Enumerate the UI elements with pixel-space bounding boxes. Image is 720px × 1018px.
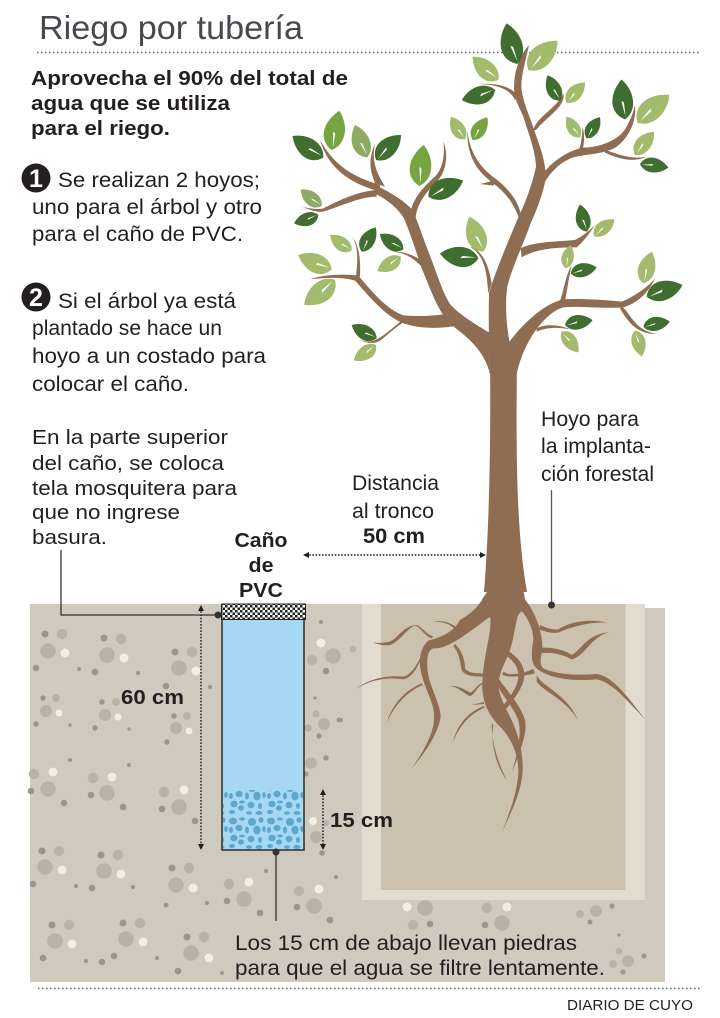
leaves: light <box>294 33 676 367</box>
step 1 <box>22 164 262 246</box>
label: distance to trunk: Distancia <box>352 472 439 495</box>
intro text: agua que se utiliza <box>31 92 231 115</box>
PVC pipe <box>222 604 306 850</box>
roots <box>355 590 645 832</box>
badge 1: 1 <box>29 165 43 193</box>
soil pebbles: dark <box>28 620 646 975</box>
label: hole: la implanta- <box>541 435 651 458</box>
badge 2 <box>22 282 50 312</box>
leaves: muted green <box>296 122 375 212</box>
leaves: dark <box>286 21 685 345</box>
label: 60 cm: 60 cm <box>121 686 184 709</box>
filter stones <box>223 790 303 849</box>
label: Caño de PVC: PVC <box>239 579 283 602</box>
step 1: uno para el árbol y otro <box>32 196 262 219</box>
title: Riego por tubería <box>39 10 303 47</box>
badge 1 <box>22 164 50 193</box>
intro text <box>31 67 348 140</box>
label: hole: Hoyo para <box>541 408 639 431</box>
credit: DIARIO DE CUYO <box>567 997 693 1014</box>
arrow: 60 cm depth <box>200 608 202 847</box>
panel: planting hole <box>362 604 645 900</box>
step 2: plantado se hace un <box>32 317 222 340</box>
label: distance to trunk: 50 cm <box>363 525 425 548</box>
water <box>222 619 304 850</box>
arrow: 50 cm distance <box>306 554 483 556</box>
arrow: 15 cm depth <box>322 792 324 847</box>
soil pebbles: white <box>48 638 512 962</box>
step 1: Se realizan 2 hoyos; <box>58 169 260 192</box>
mesh note <box>32 427 238 549</box>
stones note: para que el agua se filtre lentamente. <box>235 957 605 980</box>
label: Caño de PVC: Caño <box>234 529 288 552</box>
leaves: mid green <box>321 109 493 187</box>
step 2: Si el árbol ya está <box>58 290 236 313</box>
label: hole: ción forestal <box>541 463 654 486</box>
tree <box>286 21 685 373</box>
mesh note: que no ingrese <box>32 502 180 524</box>
leader: hole note <box>548 490 555 608</box>
mesh note: basura. <box>32 527 107 549</box>
mesh note: En la parte superior <box>32 427 228 449</box>
soil pebbles: large <box>29 629 634 968</box>
label: hole <box>541 408 654 486</box>
mesh note: del caño, se coloca <box>32 453 225 475</box>
label: 15 cm: 15 cm <box>330 809 393 832</box>
leader: stones note <box>272 848 280 921</box>
label: Caño de PVC <box>234 529 288 602</box>
label: distance to trunk: al tronco <box>352 500 434 523</box>
stones note <box>235 932 605 980</box>
step 1: para el caño de PVC. <box>32 223 243 246</box>
panel: soil background <box>28 604 665 982</box>
mesh note: tela mosquitera para <box>32 478 238 500</box>
stones note: Los 15 cm de abajo llevan piedras <box>235 932 577 955</box>
step 2: colocar el caño. <box>32 373 189 396</box>
label: distance to trunk <box>352 472 439 548</box>
badge 2: 2 <box>29 284 43 312</box>
step 2 <box>22 282 266 396</box>
intro text: para el riego. <box>31 117 170 140</box>
mosquito mesh <box>222 604 306 620</box>
trunk <box>484 355 527 592</box>
branches <box>302 45 657 373</box>
leader: mesh note <box>61 550 222 618</box>
intro text: Aprovecha el 90% del total de <box>31 67 348 90</box>
label: Caño de PVC: de <box>248 554 274 577</box>
step 2: hoyo a un costado para <box>32 345 266 368</box>
